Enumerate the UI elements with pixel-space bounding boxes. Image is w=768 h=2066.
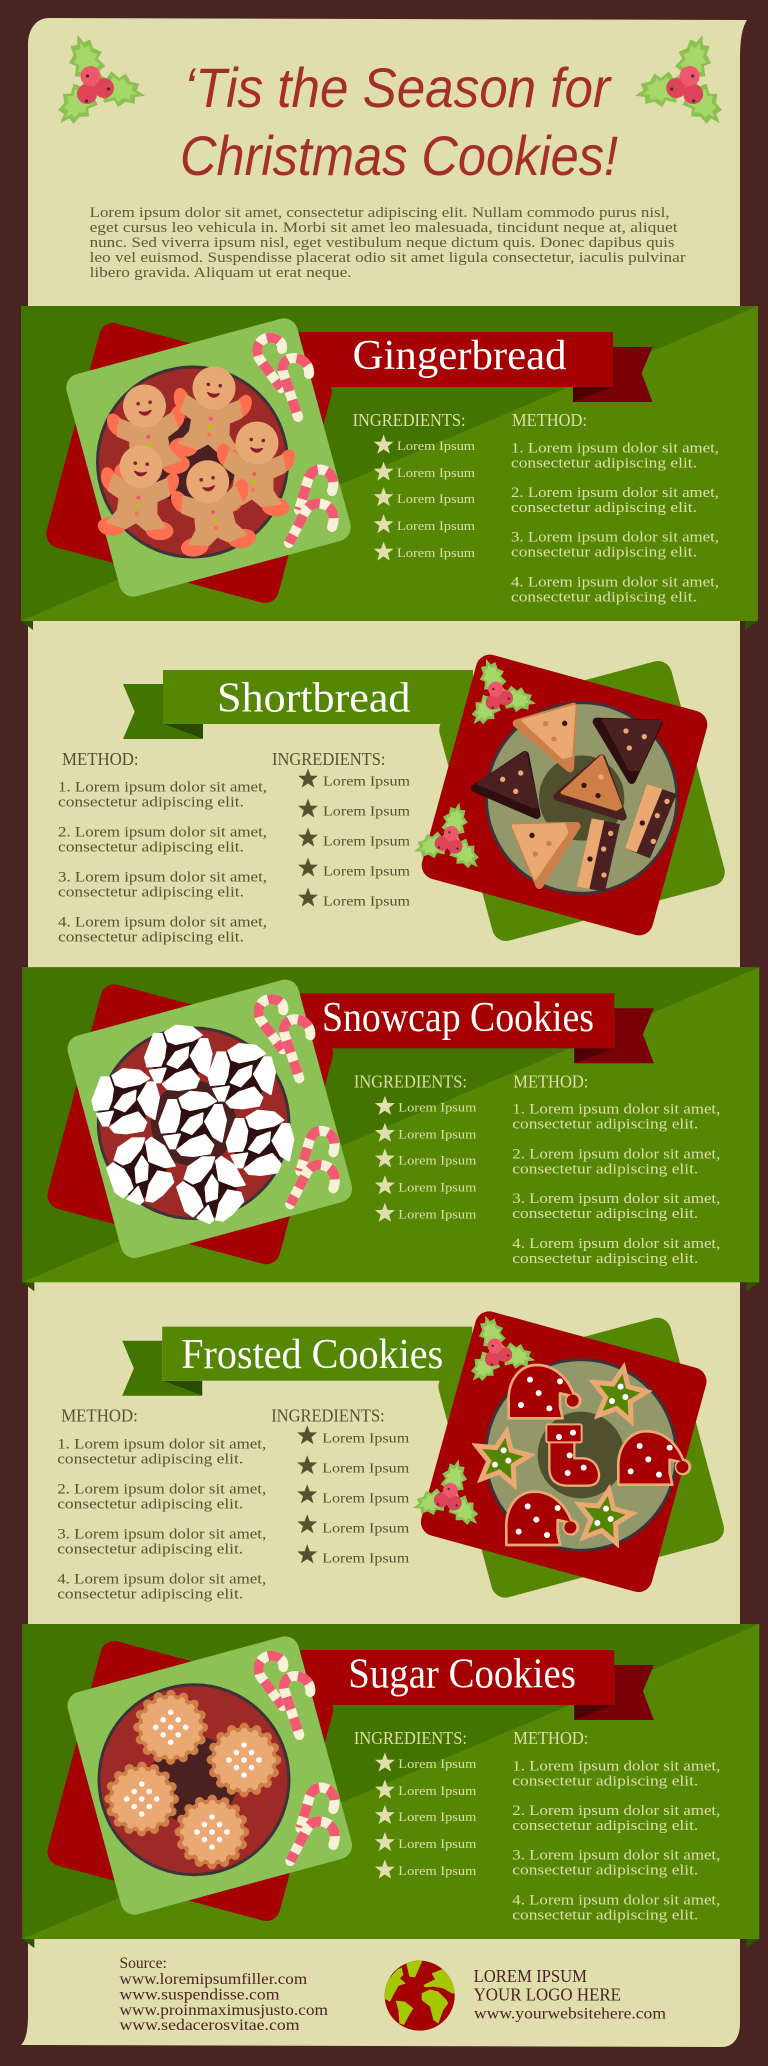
footer sources	[120, 1955, 328, 2034]
method list	[512, 1728, 720, 1924]
ingredients list: Lorem Ipsum	[397, 491, 475, 506]
footer sources: www.loremipsumfiller.com	[120, 1971, 307, 1988]
panel: sugar cookies	[22, 1624, 759, 1948]
ingredients list: Lorem Ipsum	[322, 1461, 409, 1476]
method list: consectetur adipiscing elit.	[511, 545, 697, 561]
ingredients list	[271, 1406, 409, 1566]
ingredients list: Lorem Ipsum	[323, 775, 410, 790]
method list: 3. Lorem ipsum dolor sit amet,	[511, 530, 719, 546]
method list: 3. Lorem ipsum dolor sit amet,	[57, 1526, 266, 1542]
ingredients list: Lorem Ipsum	[322, 1551, 409, 1566]
ribbon	[123, 670, 473, 739]
logo text	[474, 1966, 666, 2022]
method list: METHOD:	[513, 1071, 588, 1091]
ribbon	[300, 993, 654, 1063]
method list: 2. Lorem ipsum dolor sit amet,	[511, 485, 719, 501]
heading: Shortbread	[217, 676, 410, 722]
red tray	[418, 651, 711, 939]
method list: consectetur adipiscing elit.	[512, 1117, 698, 1133]
candy canes	[259, 999, 335, 1204]
stocking cookie	[546, 1424, 599, 1486]
method list	[512, 1071, 720, 1267]
plate of snowcap cookies	[92, 1026, 293, 1236]
ingredients list: Lorem Ipsum	[323, 805, 410, 820]
icon: holly right	[631, 29, 733, 135]
ingredients list: Lorem Ipsum	[322, 1491, 409, 1506]
method list: 2. Lorem ipsum dolor sit amet,	[57, 1481, 266, 1497]
panel: frosted cookies	[57, 1308, 727, 1602]
ingredients list: Lorem Ipsum	[397, 465, 475, 480]
method list: consectetur adipiscing elit.	[512, 1863, 698, 1879]
method list: consectetur adipiscing elit.	[58, 885, 244, 901]
method list	[58, 749, 267, 946]
ingredients list: Lorem Ipsum	[398, 1152, 476, 1167]
green mat	[436, 658, 728, 944]
ingredients list: Lorem Ipsum	[323, 865, 410, 880]
icon: holly bottom	[400, 1444, 506, 1550]
method list: METHOD:	[513, 1728, 588, 1748]
title: Christmas Cookies!	[180, 124, 618, 187]
icon: globe logo	[383, 1960, 456, 2031]
icon: holly bottom	[401, 787, 506, 893]
ingredients list: Lorem Ipsum	[397, 518, 475, 533]
ingredients list: Lorem Ipsum	[398, 1836, 476, 1851]
method list: 2. Lorem ipsum dolor sit amet,	[58, 825, 267, 841]
plate of shortbread	[475, 703, 677, 893]
method list	[511, 410, 719, 606]
ingredients list: Lorem Ipsum	[398, 1783, 476, 1798]
band background	[22, 967, 759, 1291]
method list: consectetur adipiscing elit.	[57, 1496, 243, 1512]
intro text block: nunc. Sed viverra ipsum nisl, eget vestibulum neque dictum quis. Donec dapibus quis	[90, 235, 675, 251]
ingredients list: Lorem Ipsum	[398, 1126, 476, 1141]
method list: 4. Lorem ipsum dolor sit amet,	[511, 575, 719, 591]
ingredients list: Lorem Ipsum	[398, 1809, 476, 1824]
ingredients list: INGREDIENTS:	[271, 1406, 385, 1426]
title: ‘Tis the Season for	[184, 56, 612, 119]
method list: consectetur adipiscing elit.	[511, 500, 697, 516]
ingredients list: Lorem Ipsum	[398, 1099, 476, 1114]
method list: 3. Lorem ipsum dolor sit amet,	[58, 870, 267, 886]
ingredients list: Lorem Ipsum	[323, 895, 410, 910]
method list: consectetur adipiscing elit.	[511, 590, 697, 606]
footer sources: www.proinmaximusjusto.com	[120, 2002, 328, 2019]
ingredients list: Lorem Ipsum	[323, 835, 410, 850]
ribbon	[122, 1327, 472, 1396]
method list: 4. Lorem ipsum dolor sit amet,	[57, 1571, 266, 1587]
method list: METHOD:	[512, 410, 587, 430]
logo text: YOUR LOGO HERE	[474, 1985, 621, 2005]
ingredients list: Lorem Ipsum	[397, 545, 475, 560]
heading: Gingerbread	[353, 333, 567, 379]
green mat	[435, 1315, 727, 1601]
ingredients list: Lorem Ipsum	[322, 1431, 409, 1446]
candy canes	[259, 1656, 335, 1861]
footer sources: Source:	[120, 1955, 167, 1972]
method list: consectetur adipiscing elit.	[58, 795, 244, 811]
method list	[57, 1406, 266, 1602]
panel: gingerbread	[21, 306, 758, 630]
method list: consectetur adipiscing elit.	[512, 1206, 698, 1222]
logo text: www.yourwebsitehere.com	[474, 2005, 666, 2022]
footer sources: www.sedacerosvitae.com	[120, 2017, 300, 2034]
ingredients list: Lorem Ipsum	[322, 1521, 409, 1536]
method list: consectetur adipiscing elit.	[512, 1773, 698, 1789]
method list: 4. Lorem ipsum dolor sit amet,	[58, 915, 267, 931]
green tray	[64, 976, 355, 1261]
method list: 3. Lorem ipsum dolor sit amet,	[512, 1848, 720, 1864]
intro text block: eget cursus leo vehicula in. Morbi sit amet leo malesuada, tincidunt neque at, aliquet	[90, 220, 678, 236]
intro text block: leo vel euismod. Suspendisse placerat odio sit amet ligula consectetur, iaculis pulvinar	[90, 250, 686, 266]
method list: 4. Lorem ipsum dolor sit amet,	[512, 1236, 720, 1252]
panel: snowcap cookies	[22, 967, 759, 1291]
method list: consectetur adipiscing elit.	[58, 930, 244, 946]
method list: consectetur adipiscing elit.	[58, 840, 244, 856]
ingredients list	[353, 410, 475, 561]
plate of sugar cookies	[99, 1685, 289, 1875]
method list: 1. Lorem ipsum dolor sit amet,	[58, 780, 267, 796]
method list: consectetur adipiscing elit.	[512, 1908, 698, 1924]
band background	[21, 306, 758, 630]
red mat	[44, 1638, 336, 1924]
method list: 1. Lorem ipsum dolor sit amet,	[57, 1436, 266, 1452]
red tray	[418, 1308, 710, 1595]
method list: 2. Lorem ipsum dolor sit amet,	[512, 1146, 720, 1162]
ribbon	[300, 1650, 654, 1720]
ingredients list: INGREDIENTS:	[354, 1071, 467, 1091]
heading: Frosted Cookies	[181, 1332, 443, 1378]
intro text block	[90, 205, 686, 281]
ingredients list	[354, 1728, 476, 1879]
ingredients list: Lorem Ipsum	[398, 1863, 476, 1878]
method list: 2. Lorem ipsum dolor sit amet,	[512, 1803, 720, 1819]
intro text block: Lorem ipsum dolor sit amet, consectetur adipiscing elit. Nullam commodo purus nisl,	[90, 205, 670, 221]
icon: holly top	[463, 1311, 538, 1389]
title	[180, 56, 618, 187]
method list: 1. Lorem ipsum dolor sit amet,	[512, 1758, 720, 1774]
ingredients list: Lorem Ipsum	[397, 438, 475, 453]
method list: 4. Lorem ipsum dolor sit amet,	[512, 1893, 720, 1909]
method list: METHOD:	[61, 1406, 138, 1426]
footer sources: www.suspendisse.com	[120, 1986, 280, 2003]
icon: holly left	[47, 29, 149, 135]
method list: consectetur adipiscing elit.	[512, 1161, 698, 1177]
ingredients list	[354, 1071, 476, 1222]
ingredients list: INGREDIENTS:	[272, 749, 386, 769]
method list: consectetur adipiscing elit.	[57, 1586, 243, 1602]
method list: consectetur adipiscing elit.	[512, 1251, 698, 1267]
intro text block: libero gravida. Aliquam ut erat neque.	[90, 265, 352, 281]
red mat	[43, 320, 335, 606]
ingredients list: INGREDIENTS:	[353, 410, 466, 430]
logo text: LOREM IPSUM	[474, 1966, 587, 1986]
method list: 1. Lorem ipsum dolor sit amet,	[512, 1102, 720, 1118]
ingredients list	[272, 749, 410, 910]
heading: Sugar Cookies	[348, 1652, 576, 1698]
method list: 1. Lorem ipsum dolor sit amet,	[511, 440, 719, 456]
candy canes	[257, 338, 334, 543]
method list: METHOD:	[62, 749, 139, 769]
method list: consectetur adipiscing elit.	[57, 1451, 243, 1467]
ribbon	[299, 332, 652, 402]
green tray	[63, 315, 354, 600]
method list: consectetur adipiscing elit.	[512, 1818, 698, 1834]
method list: 3. Lorem ipsum dolor sit amet,	[512, 1191, 720, 1207]
band background	[22, 1624, 759, 1948]
panel: shortbread	[58, 651, 728, 946]
plate of frosted cookies	[466, 1357, 691, 1550]
red mat	[44, 981, 336, 1267]
ingredients list: INGREDIENTS:	[354, 1728, 467, 1748]
heading: Snowcap Cookies	[322, 995, 594, 1041]
ingredients list: Lorem Ipsum	[398, 1206, 476, 1221]
ingredients list: Lorem Ipsum	[398, 1179, 476, 1194]
method list: consectetur adipiscing elit.	[511, 455, 697, 471]
green tray	[64, 1633, 355, 1918]
ingredients list: Lorem Ipsum	[398, 1756, 476, 1771]
icon: holly top	[464, 654, 539, 732]
method list: consectetur adipiscing elit.	[57, 1541, 243, 1557]
plate of gingerbread men	[93, 362, 301, 559]
